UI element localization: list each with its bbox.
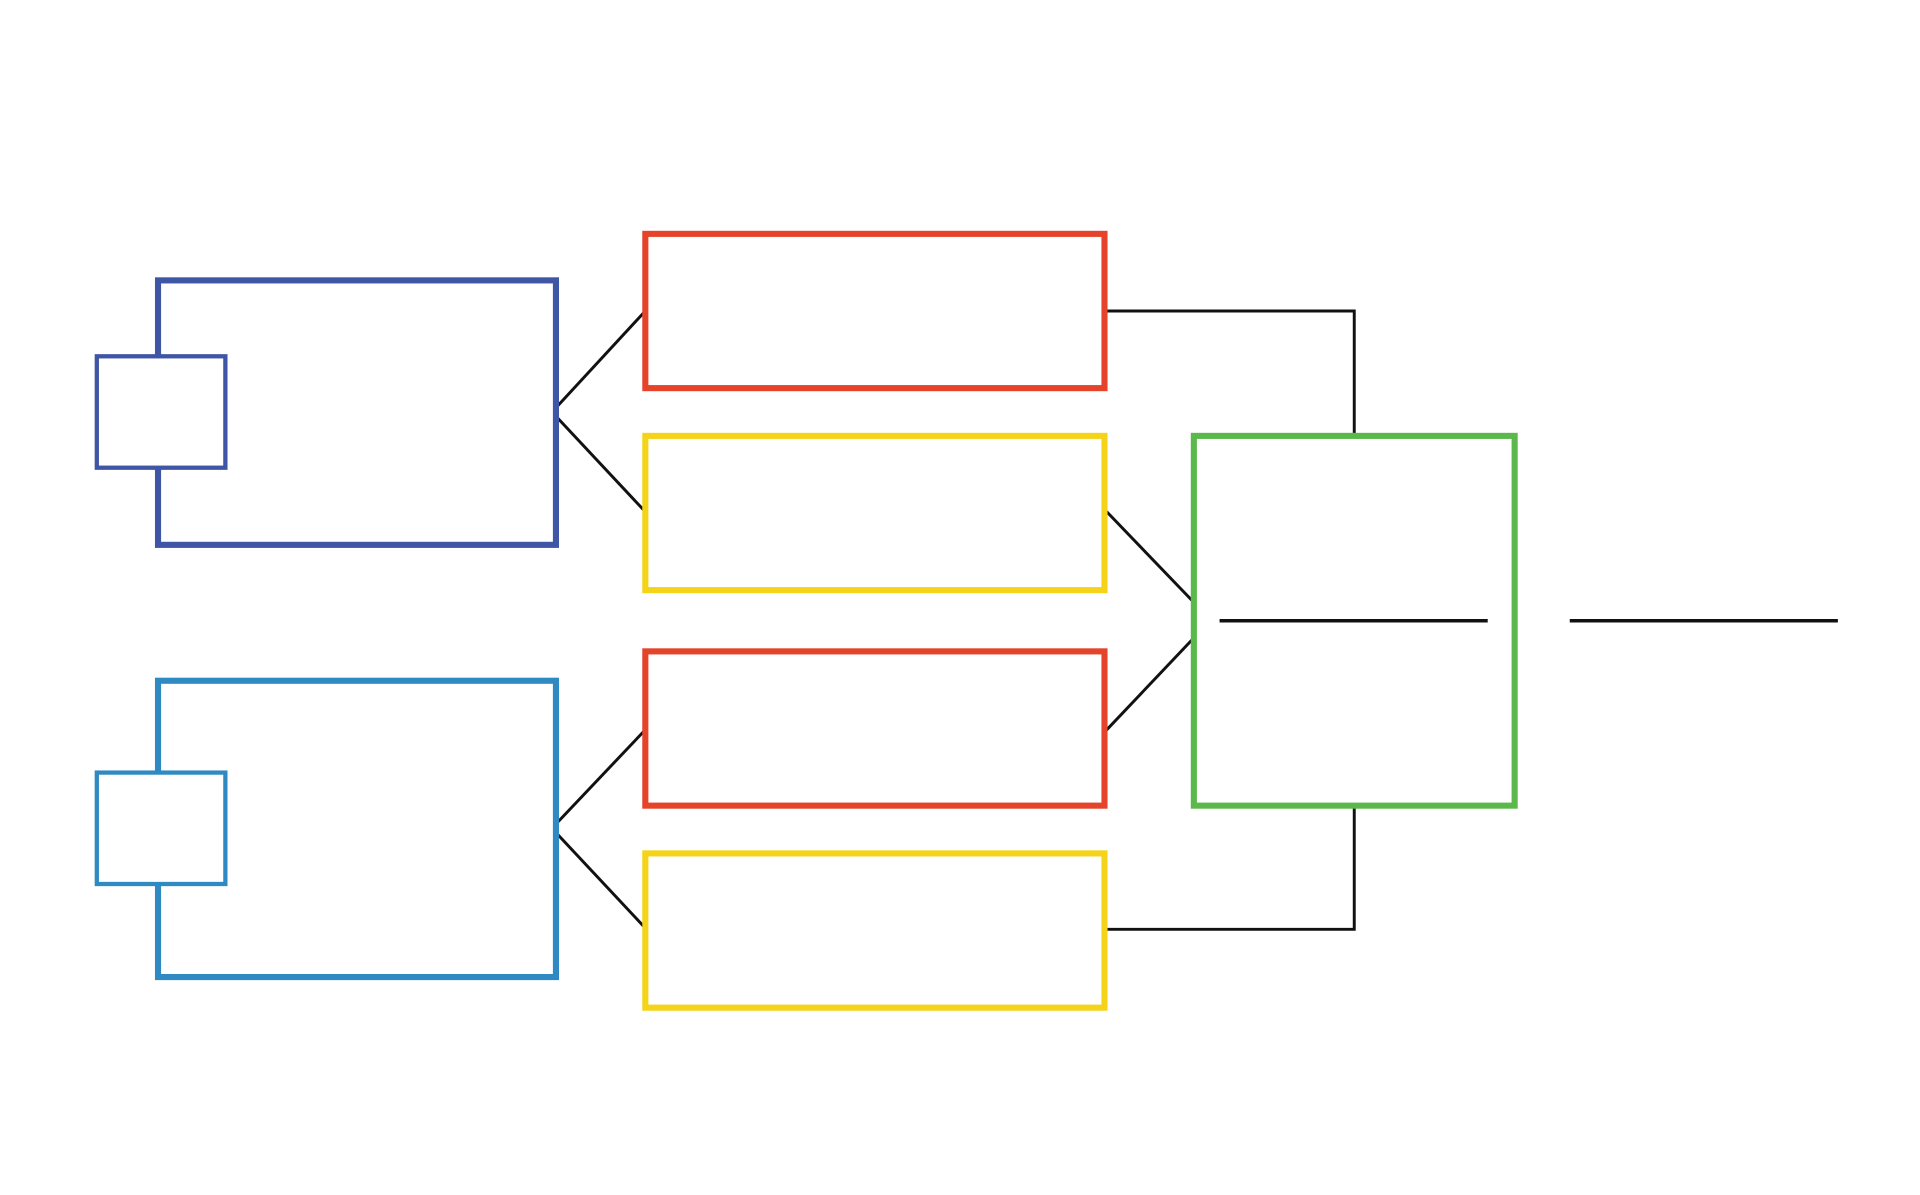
connectors: top blue box to red/yellow boxes [556,311,645,512]
panel: yellow box 2 [645,853,1104,1008]
panel: bottom light-blue box with tab [97,681,556,977]
panel: red box 2 [645,651,1104,806]
panel: top blue box with tab [97,280,556,545]
panel: green result box [1194,436,1515,806]
panel: yellow box 1 [645,436,1104,590]
connectors: middle boxes to green box [1104,311,1354,929]
connectors: bottom blue box to red/yellow boxes [556,730,645,928]
answer line [1570,619,1838,622]
panel: red box 1 [645,234,1104,388]
